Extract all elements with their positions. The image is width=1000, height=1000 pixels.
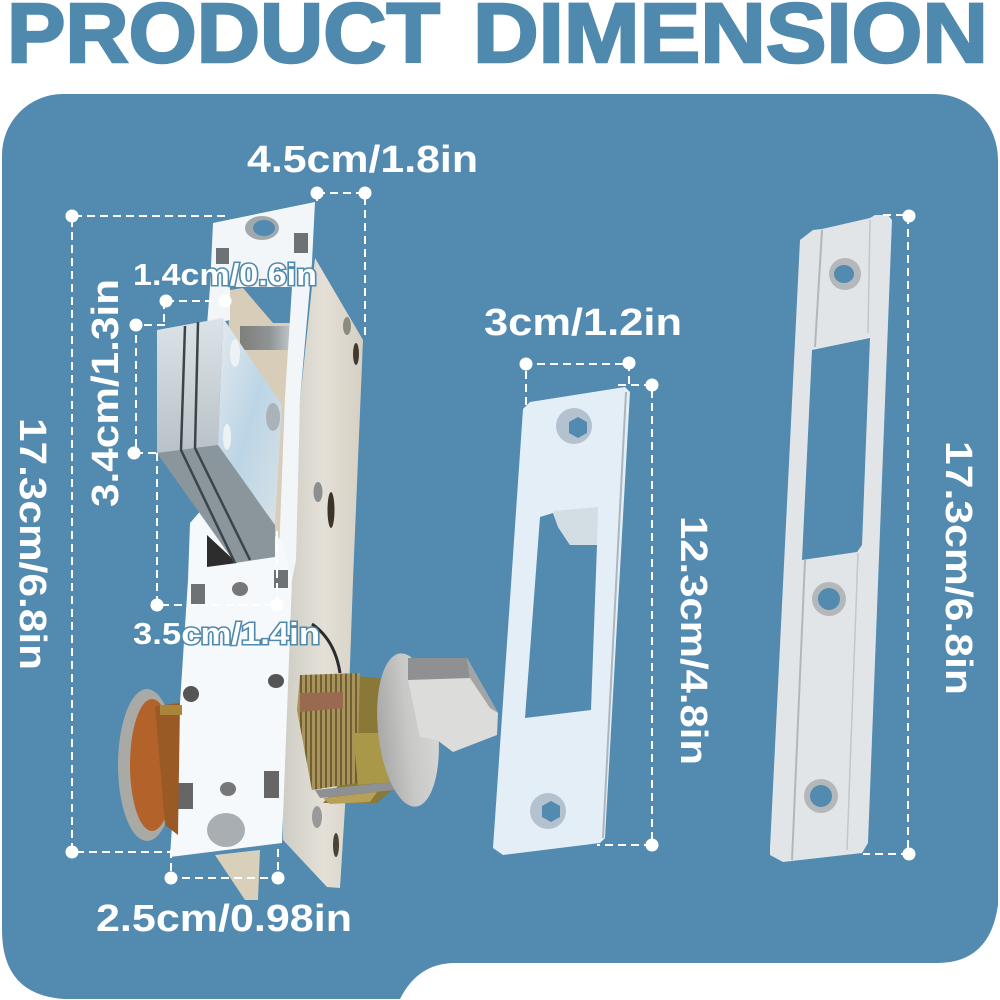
dimension lines bbox=[72, 193, 908, 878]
strike plate: middle bbox=[493, 387, 630, 855]
lower front plate upper section bbox=[170, 500, 292, 857]
label: 3.5cm plate width: 3.5cm/1.4in bbox=[133, 616, 320, 651]
bolt pin bbox=[240, 326, 290, 350]
label: 3.4cm bolt height: 3.4cm/1.3in bbox=[85, 279, 127, 507]
beige wedge bbox=[225, 288, 290, 560]
label: 12.3cm strike height: 12.3cm/4.8in bbox=[672, 516, 714, 765]
back plate bbox=[283, 258, 363, 888]
lower tab bbox=[215, 850, 260, 900]
wire bbox=[312, 624, 340, 673]
bolt block bbox=[157, 318, 282, 567]
label: 2.5cm faceplate width: 2.5cm/0.98in bbox=[96, 898, 352, 940]
lock assembly bbox=[118, 202, 498, 900]
thumb turn bbox=[408, 658, 498, 752]
label: 17.3cm right height: 17.3cm/6.8in bbox=[937, 441, 979, 695]
right cylinder body and threads bbox=[297, 673, 394, 804]
label: 17.3cm left height: 17.3cm/6.8in bbox=[11, 418, 53, 670]
right cylinder cap bbox=[370, 650, 446, 810]
upper front plate bbox=[207, 202, 315, 580]
strike plate: right bbox=[770, 215, 892, 862]
title bbox=[7, 0, 988, 80]
label: 4.5cm width: 4.5cm/1.8in bbox=[247, 139, 478, 181]
left cylinder cap bbox=[118, 689, 182, 841]
label: 3cm strike width: 3cm/1.2in bbox=[484, 302, 682, 344]
label: 1.4cm bolt depth: 1.4cm/0.6in bbox=[133, 257, 317, 292]
dimension endpoints bbox=[66, 186, 916, 884]
mounting holes and screws bbox=[178, 216, 359, 857]
